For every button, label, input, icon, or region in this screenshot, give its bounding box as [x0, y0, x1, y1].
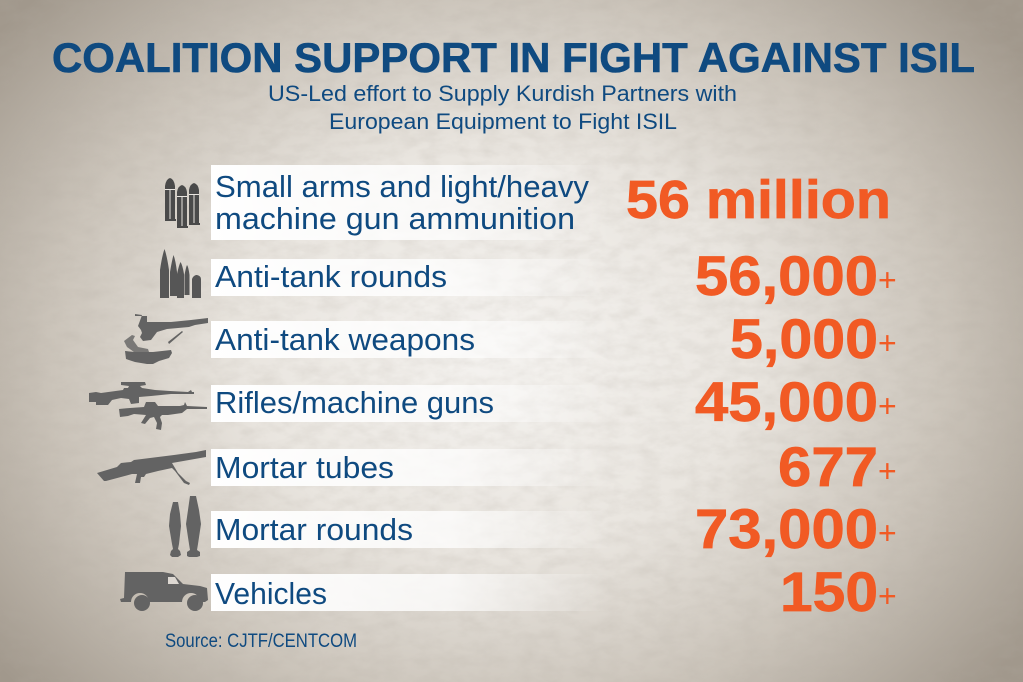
label: Mortar tubes	[215, 450, 394, 485]
row 7: vehicles	[120, 560, 897, 623]
plus: +	[878, 388, 897, 424]
label: Mortar rounds	[215, 512, 413, 547]
row 4: rifles/machine guns	[89, 370, 897, 433]
icon: machine gun	[97, 450, 206, 485]
label bar	[211, 574, 611, 611]
label: Small arms and light/heavy	[215, 169, 589, 204]
label bar	[211, 259, 611, 296]
row 5: mortar tubes	[97, 435, 897, 498]
value: 5,000	[730, 307, 878, 370]
label: Anti-tank rounds	[215, 259, 447, 294]
source: Source: CJTF/CENTCOM	[165, 631, 357, 652]
plus: +	[878, 453, 897, 489]
subtitle: US-Led effort to Supply Kurdish Partners with	[268, 81, 737, 106]
icon: mortar shells	[169, 496, 201, 557]
plus: +	[878, 262, 897, 298]
value: 56 million	[626, 170, 891, 230]
label: Rifles/machine guns	[215, 385, 494, 420]
label bar	[211, 165, 611, 240]
row 6: mortar rounds	[169, 496, 897, 560]
icon: bullets	[165, 178, 200, 228]
row 1: small arms ammunition	[165, 165, 891, 240]
value: 56,000	[695, 244, 878, 307]
row 2: anti-tank rounds	[160, 244, 897, 307]
title: COALITION SUPPORT IN FIGHT AGAINST ISIL	[52, 34, 975, 81]
label bar	[211, 449, 611, 486]
plus: +	[878, 515, 897, 551]
subtitle	[268, 81, 737, 134]
value: 45,000	[695, 370, 878, 433]
icon: rifles	[89, 382, 207, 430]
icon: truck	[120, 572, 208, 611]
label: machine gun ammunition	[215, 201, 575, 236]
plus: +	[878, 325, 897, 361]
value: 150	[780, 560, 878, 623]
label bar	[211, 321, 611, 358]
label: Vehicles	[215, 576, 327, 611]
label: Anti-tank weapons	[215, 322, 475, 357]
value: 677	[778, 435, 878, 498]
icon: mounted weapon	[124, 314, 208, 364]
subtitle: European Equipment to Fight ISIL	[329, 109, 677, 134]
icon: shells	[160, 249, 201, 298]
label	[215, 169, 589, 236]
label bar	[211, 511, 611, 548]
plus: +	[878, 578, 897, 614]
value: 73,000	[695, 497, 878, 560]
label bar	[211, 385, 611, 422]
row 3: anti-tank weapons	[124, 307, 897, 370]
